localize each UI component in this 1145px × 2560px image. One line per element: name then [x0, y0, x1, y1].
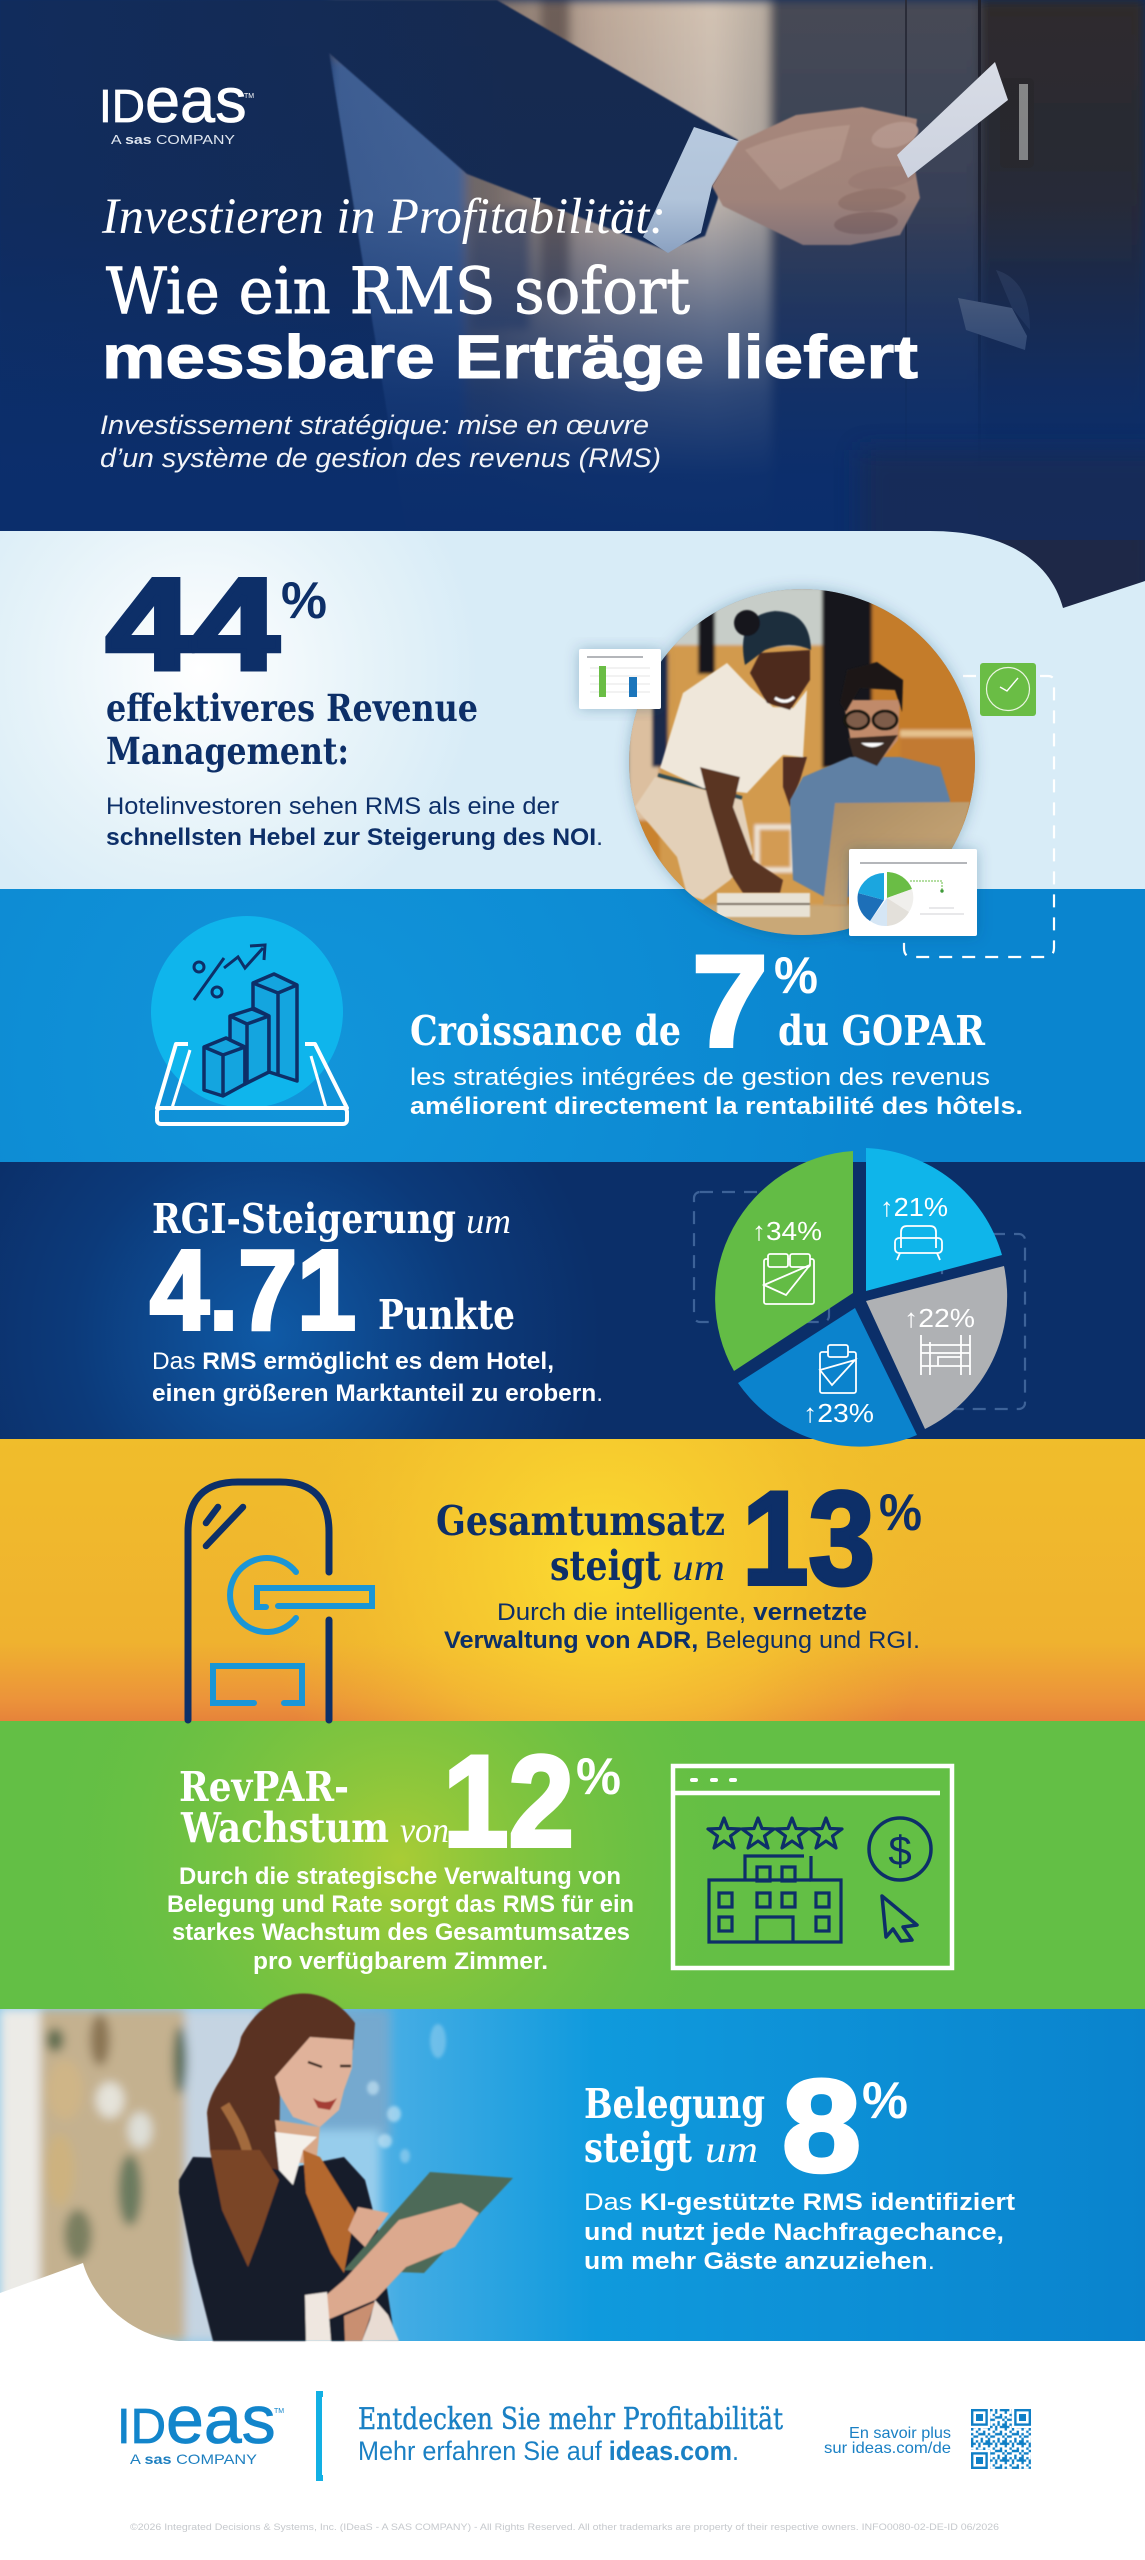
panel: white footer background [0, 2341, 1145, 2560]
logo: IDeaS header: IDeas [99, 66, 247, 136]
text: occupancy description: und nutzt jede Nachfragechance, [584, 2219, 1004, 2246]
text: occupancy description: Das KI-gestützte RMS identifiziert [584, 2189, 1015, 2216]
bracket divider [319, 2394, 323, 2478]
subtitle: Investissement stratégique: mise en œuvre [100, 410, 649, 440]
dashed frames behind pie [694, 1192, 1025, 1409]
text: occupancy description [584, 2189, 1015, 2275]
hotel building [709, 1856, 841, 1942]
text: occupancy description: um mehr Gäste anzuziehen . [584, 2248, 935, 2275]
dashed connector [904, 676, 1054, 957]
percent and arrow [194, 945, 265, 1000]
stat: 13 percent total revenue: Gesamtumsatz [436, 1497, 725, 1545]
text: RGI description: einen größeren Marktanteil zu erobern . [152, 1380, 603, 1407]
text: total revenue description: Verwaltung von ADR, Belegung und RGI. [444, 1627, 920, 1654]
pie chart: room categories [715, 1148, 1007, 1447]
slice: 34 percent green [715, 1151, 853, 1371]
subtitle: d’un système de gestion des revenus (RMS) [100, 443, 661, 473]
shirt cuff [643, 127, 741, 253]
browser window [673, 1766, 952, 1968]
cursor [882, 1896, 917, 1941]
panel: green RevPAR background [0, 1721, 1145, 2009]
logo: IDeaS footer: TM [274, 2408, 284, 2415]
dollar coin [869, 1818, 931, 1880]
woman figure [179, 1994, 513, 2341]
icon: door lock plate and handle [958, 78, 1034, 350]
text: RevPAR description: pro verfügbarem Zimmer. [253, 1948, 548, 1975]
QR caption: sur ideas.com/de [824, 2440, 951, 2457]
stat: 8 percent occupancy: Belegung [584, 2080, 765, 2128]
stat: 7 percent GOPAR: Croissance de [410, 1007, 681, 1055]
photo: two colleagues at laptop [629, 588, 982, 945]
stat: 12 percent RevPAR: 12 [443, 1728, 574, 1874]
header photo: keycard at hotel door [0, 0, 1145, 630]
panel: blue occupancy background [0, 2009, 1145, 2341]
header gradient overlays [0, 0, 1145, 630]
stat: 7 percent GOPAR: du GOPAR [778, 1007, 986, 1055]
text: investors: Hotelinvestoren sehen RMS als eine der [106, 793, 559, 820]
stat: 7 percent GOPAR [410, 928, 986, 1074]
title block: Investieren in Profitabilität: [101, 189, 666, 245]
icon: booking window with hotel, stars, dollar, cursor [673, 1766, 952, 1968]
white curved corner [0, 2263, 179, 2341]
title block: messbare Erträge liefert [102, 323, 918, 391]
QR caption: En savoir plus [849, 2425, 951, 2442]
stat: 13 percent total revenue [436, 1465, 922, 1613]
slice: 21 percent cyan [866, 1148, 1002, 1291]
panel: blue GOPAR background [0, 889, 1145, 1162]
stars [708, 1818, 842, 1848]
stat: 12 percent RevPAR: RevPAR- [179, 1763, 349, 1811]
stat: 4.71 Punkte: 4.71 [150, 1227, 356, 1353]
text: investors: schnellsten Hebel zur Steigerung des NOI . [106, 824, 603, 851]
stat: 12 percent RevPAR: von [400, 1810, 449, 1850]
panel: yellow total revenue background [0, 1439, 1145, 1721]
text: GOPAR description: améliorent directement la rentabilité des hôtels. [410, 1093, 1023, 1120]
stat: 12 percent RevPAR: % [576, 1748, 621, 1806]
copyright line: ©2026 Integrated Decisions & Systems, Inc. (IDeaS - A SAS COMPANY) - All Rights Reserved. All other trademarks are property of their respective owners. INFO0080-02-DE-ID 06/2026 [130, 2522, 999, 2533]
tablet outline [157, 1044, 347, 1124]
slice: 23 percent blue: ↑23% [803, 1398, 874, 1428]
text: investors [106, 793, 603, 851]
subtitle [100, 410, 661, 473]
call to action [358, 2402, 783, 2466]
card: bar chart [579, 649, 661, 709]
stat: 4.71 Punkte [150, 1227, 515, 1353]
stat: 44 percent: % [281, 572, 327, 630]
stat: 7 percent GOPAR: % [774, 947, 818, 1005]
stat: 44 percent: 44 [106, 551, 279, 697]
heading: RGI-Steigerung: um [466, 1201, 511, 1241]
text: RGI description: Das RMS ermöglicht es dem Hotel, [152, 1348, 554, 1375]
text: RevPAR description: starkes Wachstum des Gesamtumsatzes [172, 1919, 630, 1946]
stat: 13 percent total revenue: steigt [550, 1542, 661, 1590]
heading: RGI-Steigerung: RGI-Steigerung [152, 1195, 456, 1243]
slice: 21 percent cyan: ↑21% [880, 1192, 948, 1222]
stat: 4.71 Punkte: Punkte [378, 1291, 515, 1339]
stat: 8 percent occupancy: um [705, 2129, 758, 2171]
logo: IDeaS footer: A sas COMPANY [130, 2451, 258, 2467]
heading: effektiveres Revenue Management: Management: [106, 729, 349, 773]
logo: IDeaS header: A sas COMPANY [111, 132, 235, 147]
card: pie chart [849, 849, 977, 936]
slice: 23 percent blue [738, 1308, 917, 1447]
icon: growth chart on tablet [151, 916, 347, 1124]
stat: 44 percent [106, 551, 327, 697]
text: GOPAR description: les stratégies intégrées de gestion des revenus [410, 1064, 990, 1091]
stat: 7 percent GOPAR: 7 [692, 928, 768, 1074]
logo: IDeaS footer: IDeas [117, 2382, 276, 2458]
text: RevPAR description: Durch die strategische Verwaltung von [179, 1863, 621, 1890]
photo: woman with tablet [0, 1994, 513, 2341]
text: RevPAR description [167, 1863, 634, 1975]
title block: Wie ein RMS sofort [106, 255, 690, 329]
keycard [897, 62, 1008, 178]
call to action: Mehr erfahren Sie auf ideas.com. [358, 2436, 739, 2466]
woman [635, 610, 811, 900]
suit jacket and sleeve [0, 0, 738, 620]
stat: 13 percent total revenue: um [672, 1547, 725, 1589]
stat: 8 percent occupancy: 8 [782, 2052, 861, 2199]
stat: 12 percent RevPAR: Wachstum [180, 1804, 389, 1852]
text: GOPAR description [410, 1064, 1023, 1120]
slice: 22 percent gray [866, 1266, 1007, 1429]
text: total revenue description [444, 1599, 920, 1654]
bokeh lights [367, 2024, 446, 2163]
man [717, 662, 970, 917]
stat: 8 percent occupancy: % [862, 2072, 908, 2130]
slice: 22 percent gray: ↑22% [904, 1303, 975, 1333]
panel: navy RGI background [0, 1162, 1145, 1439]
stat: 12 percent RevPAR [179, 1728, 621, 1874]
card: green clock [980, 663, 1036, 716]
logo: IDeaS header: TM [244, 93, 254, 100]
text: total revenue description: Durch die intelligente, vernetzte [497, 1599, 867, 1626]
icon: door with handle [188, 1482, 372, 1720]
isometric bars [204, 974, 297, 1096]
stat: 13 percent total revenue: 13 [742, 1465, 875, 1613]
call to action: Entdecken Sie mehr Profitabilität [358, 2402, 783, 2437]
slice: 34 percent green: ↑34% [752, 1216, 822, 1246]
QR code [971, 2409, 1031, 2469]
heading: effektiveres Revenue Management: effektiveres Revenue [106, 686, 478, 730]
QR caption [824, 2425, 951, 2457]
panel: light blue background with curved top corner [0, 531, 1145, 889]
stat: 8 percent occupancy: steigt [584, 2124, 692, 2172]
dollar coin: $ [888, 1827, 912, 1874]
stat: 13 percent total revenue: % [879, 1484, 922, 1542]
hand [712, 107, 921, 245]
text: RevPAR description: Belegung und Rate sorgt das RMS für ein [167, 1891, 634, 1918]
title block [101, 189, 918, 391]
heading: effektiveres Revenue Management [106, 686, 478, 773]
stat: 8 percent occupancy [584, 2052, 908, 2199]
text: RGI description [152, 1348, 603, 1407]
